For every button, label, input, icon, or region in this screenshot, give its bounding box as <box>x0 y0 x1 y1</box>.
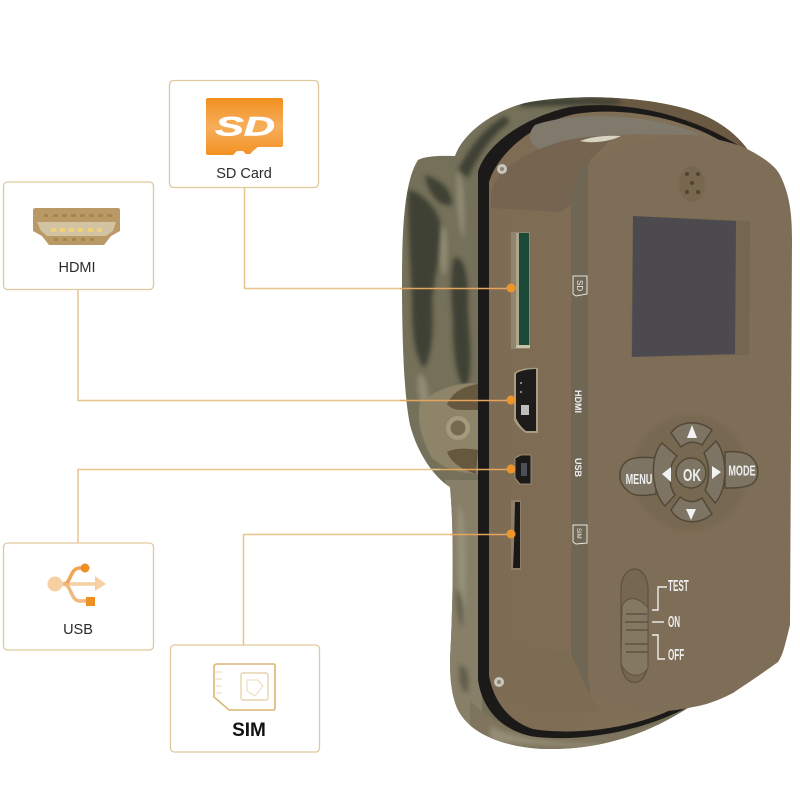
USB side marking: USB <box>573 458 583 478</box>
down button <box>671 497 712 522</box>
ridge strip <box>571 160 590 695</box>
connector line: HDMI <box>78 289 516 404</box>
up button <box>671 423 712 447</box>
switch labels <box>652 577 689 664</box>
lower shell tone <box>445 480 482 740</box>
USB port <box>515 455 531 484</box>
panel: SD Card <box>170 80 318 188</box>
MODE button: MODE <box>728 462 756 479</box>
panel: HDMI <box>4 182 154 290</box>
icon: SIM card <box>214 664 275 710</box>
camera camouflage shell <box>402 90 760 760</box>
side panel <box>489 112 735 731</box>
label: SD Card: SD Card <box>216 166 272 182</box>
OK button: OK <box>683 467 701 486</box>
screws <box>494 164 507 687</box>
power slider switch <box>621 569 648 682</box>
rubber gasket <box>478 105 745 738</box>
LCD screen <box>631 216 750 357</box>
front panel <box>588 135 792 712</box>
label: SIM: SIM <box>232 720 266 741</box>
panel: SIM <box>170 645 320 752</box>
top panel highlight <box>580 136 621 142</box>
SD side marking: SD <box>575 280 584 291</box>
hood shade <box>491 136 615 212</box>
camera illustration <box>402 90 792 760</box>
button pad <box>620 415 758 531</box>
SIM side marking: SIM <box>575 528 581 539</box>
label: HDMI: HDMI <box>58 260 96 276</box>
label: USB: USB <box>63 622 93 638</box>
icon: USB symbol <box>48 564 106 606</box>
MENU button: MENU <box>626 471 652 488</box>
left button <box>653 443 677 506</box>
connector line: USB <box>78 464 516 543</box>
SIM side marking <box>573 525 587 544</box>
switch labels: TEST <box>668 577 689 595</box>
mounting lug <box>419 383 482 474</box>
connector line: SIM <box>244 530 516 645</box>
icon: SD card: SD <box>215 111 275 142</box>
SD card slot <box>511 232 530 349</box>
HDMI port <box>514 368 538 433</box>
HDMI side marking: HDMI <box>573 390 583 413</box>
SIM slot <box>511 500 521 570</box>
icon: SD card <box>206 98 283 155</box>
grey top rim <box>530 116 700 150</box>
panel: USB <box>4 543 154 650</box>
right button <box>704 441 725 503</box>
switch labels: ON <box>668 613 680 631</box>
connector line: SD Card <box>244 187 516 292</box>
switch labels: OFF <box>668 646 685 664</box>
lower shoulder <box>500 644 600 713</box>
speaker grille <box>679 166 705 202</box>
SD side marking <box>573 276 587 296</box>
icon: HDMI connector <box>33 208 120 245</box>
